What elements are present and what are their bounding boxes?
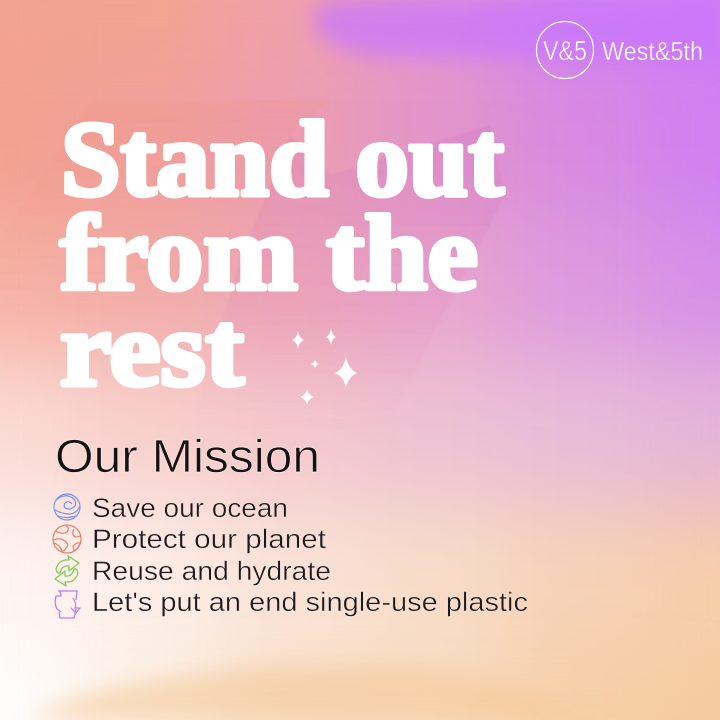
- logo circle monogram: [536, 22, 594, 78]
- list item: Protect our planet: Protect our planet: [92, 524, 327, 554]
- icon: reusable bottle cycle: [55, 591, 80, 618]
- logo circle monogram: V&5: [543, 35, 587, 66]
- list item: Let's put an end single-use plastic: Let's put an end single-use plastic: [92, 587, 528, 617]
- heading: Our Mission: Our Mission: [55, 430, 320, 482]
- title: [60, 101, 504, 409]
- list item: Reuse and hydrate: Reuse and hydrate: [92, 556, 331, 586]
- sparkles: [292, 329, 357, 405]
- icon: ocean: [54, 494, 80, 520]
- icon: planet: [53, 525, 81, 553]
- peach blob bottom: [30, 665, 580, 720]
- title line 1: Stand out: [61, 101, 504, 219]
- logo: West&5th: [536, 22, 703, 78]
- list item: Save our ocean: Save our ocean: [92, 493, 288, 523]
- title line 2: from the: [60, 195, 478, 313]
- logo wordmark: West&5th: [602, 36, 703, 66]
- title line 3: rest: [60, 291, 244, 409]
- diagonal light shapes: [0, 100, 505, 430]
- purple blob top right: [312, 0, 720, 62]
- icon: recycle arrows: [55, 556, 79, 586]
